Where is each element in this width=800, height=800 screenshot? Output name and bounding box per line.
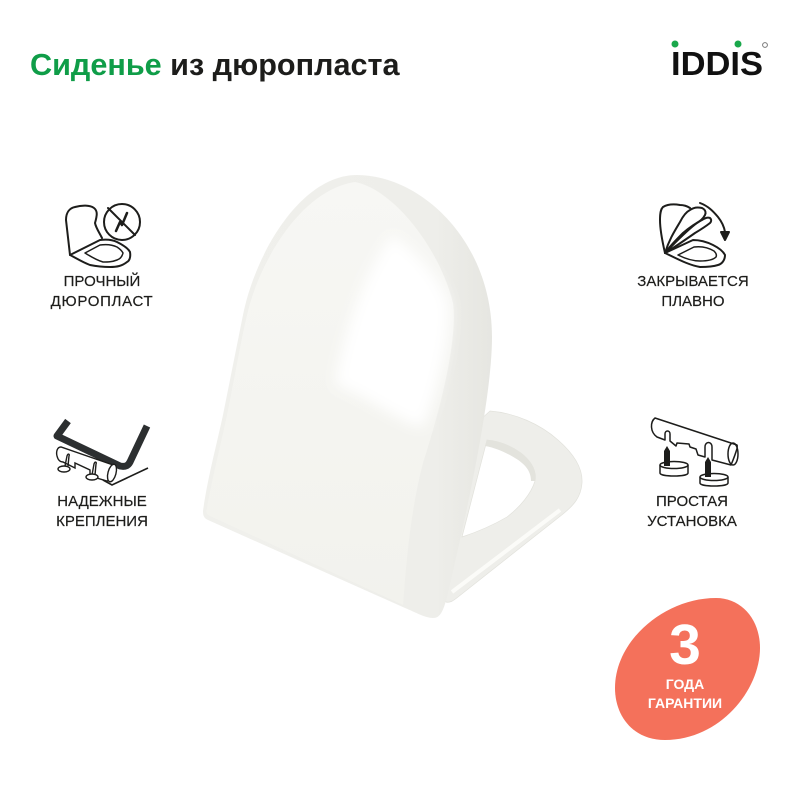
registered mark [763, 43, 767, 47]
lid top face [206, 182, 454, 605]
icon: reliable hinges [57, 421, 148, 485]
label: reliable hinges: КРЕПЛЕНИЯ [56, 513, 148, 530]
label: soft close: ПЛАВНО [661, 293, 725, 310]
right disc [700, 477, 728, 486]
label: soft close [637, 273, 749, 310]
seat front edge highlight [452, 510, 560, 592]
warranty text: ГОДА [666, 676, 704, 692]
lid rim [203, 175, 492, 618]
seat frame [57, 421, 147, 466]
label: durable [50, 272, 153, 310]
hinge bolts [65, 454, 96, 475]
warranty badge: ГАРАНТИИ [648, 695, 722, 711]
icon: easy install [651, 418, 738, 486]
icon: durable seat [66, 204, 140, 267]
label: durable: ПРОЧНЫЙ [64, 273, 140, 290]
warranty number: 3 [669, 613, 701, 677]
left screw [664, 446, 670, 466]
label: durable: ДЮРОПЛАСТ [51, 293, 153, 310]
icon: soft close [660, 203, 729, 267]
left disc [660, 465, 688, 476]
logo wordmark: IDDIS [671, 46, 763, 83]
seat ring [440, 411, 582, 602]
logo dots [672, 40, 678, 48]
label: easy install: УСТАНОВКА [647, 513, 737, 530]
label: reliable hinges: НАДЕЖНЫЕ [57, 493, 147, 510]
seat inner wall [485, 440, 535, 481]
label: easy install [647, 493, 737, 530]
product: toilet seat [203, 175, 582, 618]
right screw [705, 457, 711, 477]
badge blob [615, 598, 760, 740]
label: soft close: ЗАКРЫВАЕТСЯ [637, 273, 749, 290]
base plate line [103, 468, 148, 485]
rail [651, 418, 737, 465]
lid highlight [335, 235, 449, 428]
title: Сиденье из дюропласта [30, 48, 400, 82]
logo [671, 40, 767, 83]
warranty badge [615, 598, 760, 740]
hinge cylinder [57, 447, 116, 481]
label: easy install: ПРОСТАЯ [656, 493, 728, 510]
label: reliable hinges [56, 493, 148, 530]
